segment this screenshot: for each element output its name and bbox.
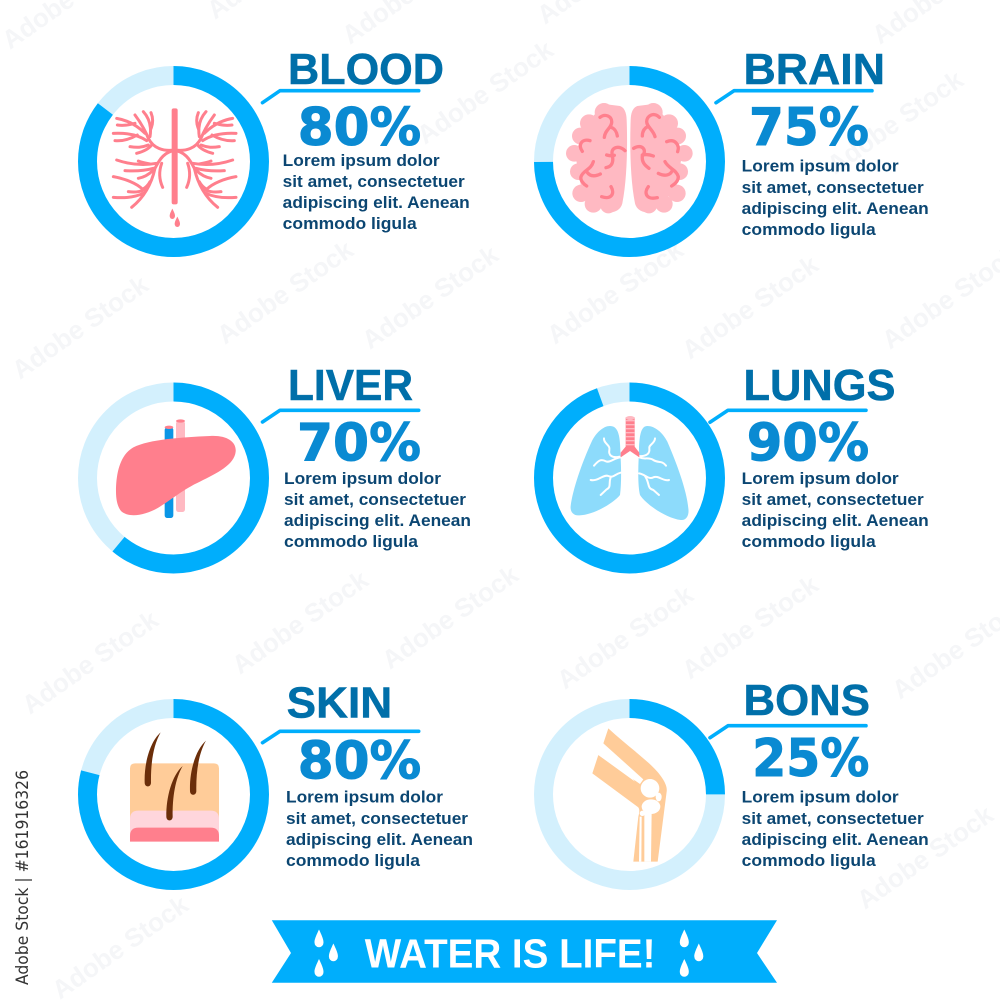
text block: sit amet, consectetuer xyxy=(284,491,467,509)
leader line xyxy=(710,410,866,422)
text block: adipiscing elit. Aenean xyxy=(284,512,471,530)
panel: lungs xyxy=(544,361,929,564)
text block xyxy=(284,470,471,551)
panel: skin xyxy=(88,679,473,880)
watermark: Adobe Stock xyxy=(551,579,699,695)
heading: brain: BRAIN xyxy=(744,45,885,94)
watermark: Adobe Stock xyxy=(851,799,999,915)
watermark: Adobe Stock xyxy=(16,604,164,720)
text block: Lorem ipsum dolor xyxy=(742,470,899,488)
percentage: 25%: 25% xyxy=(752,729,869,789)
text block: commodo ligula xyxy=(742,852,877,870)
panel: brain xyxy=(544,45,929,248)
leader line xyxy=(262,731,419,743)
watermark: Adobe Stock xyxy=(226,564,374,680)
heading: lungs: LUNGS xyxy=(744,361,896,410)
text block: sit amet, consectetuer xyxy=(742,179,924,197)
panel: bones xyxy=(544,676,929,880)
text block xyxy=(742,470,929,551)
leader line xyxy=(710,726,866,738)
donut chart: liver 70% xyxy=(88,392,260,564)
watermark: Adobe Stock xyxy=(376,559,524,675)
text block xyxy=(283,152,470,233)
text block: sit amet, consectetuer xyxy=(742,810,924,828)
text block: Lorem ipsum dolor xyxy=(286,789,444,807)
icon: left water drops xyxy=(314,930,338,977)
text block: commodo ligula xyxy=(283,215,418,233)
donut chart: lungs 90% xyxy=(544,392,716,564)
donut chart: blood 80% xyxy=(88,76,260,248)
percentage: 80%: 80% xyxy=(298,98,421,158)
icon: liver xyxy=(116,419,236,518)
heading: liver: LIVER xyxy=(288,361,413,410)
text block: sit amet, consectetuer xyxy=(283,173,465,191)
text block xyxy=(742,158,929,239)
text block: Lorem ipsum dolor xyxy=(283,152,440,170)
percentage: 70%: 70% xyxy=(297,414,421,474)
donut chart: brain 75% xyxy=(544,76,716,248)
heading: blood: BLOOD xyxy=(288,45,444,94)
watermark: Adobe Stock xyxy=(356,239,504,355)
text block: Lorem ipsum dolor xyxy=(284,470,442,488)
watermark: Adobe Stock xyxy=(411,34,559,150)
text block: Lorem ipsum dolor xyxy=(742,158,899,176)
text block xyxy=(742,789,929,870)
watermark: Adobe Stock xyxy=(676,249,824,365)
heading: bones: BONS xyxy=(744,676,870,725)
banner: water is life xyxy=(272,920,777,983)
watermark: Adobe Stock xyxy=(821,64,969,180)
text block: adipiscing elit. Aenean xyxy=(742,512,929,530)
watermark: Adobe Stock xyxy=(6,269,154,385)
text block: commodo ligula xyxy=(284,533,419,551)
percentage: 80%: 80% xyxy=(298,731,421,791)
text block: adipiscing elit. Aenean xyxy=(742,200,929,218)
ribbon shape xyxy=(272,920,777,983)
heading: skin: SKIN xyxy=(287,679,392,728)
donut chart: skin 80% xyxy=(88,708,260,880)
leader line xyxy=(716,91,872,103)
icon: right water drops xyxy=(680,930,703,977)
percentage: 90%: 90% xyxy=(747,414,869,474)
icon: knee joint xyxy=(592,728,667,862)
panel: liver xyxy=(88,361,471,564)
text block: sit amet, consectetuer xyxy=(286,810,469,828)
text block: adipiscing elit. Aenean xyxy=(742,831,929,849)
icon: brain xyxy=(566,103,693,213)
text block: adipiscing elit. Aenean xyxy=(283,194,470,212)
banner text: WATER IS LIFE! xyxy=(365,930,656,976)
icon: skin layers with hair xyxy=(130,732,219,842)
text block xyxy=(286,789,473,870)
text block: Lorem ipsum dolor xyxy=(742,789,899,807)
text block: commodo ligula xyxy=(742,533,877,551)
icon: lungs xyxy=(571,416,689,520)
text block: commodo ligula xyxy=(742,221,877,239)
icon: blood vessels xyxy=(113,108,236,227)
stock credit: Adobe Stock | #161916326 xyxy=(13,770,33,985)
watermark: Adobe Stock xyxy=(211,234,359,350)
watermark: Adobe Stock xyxy=(541,234,689,350)
text block: sit amet, consectetuer xyxy=(742,491,924,509)
text block: adipiscing elit. Aenean xyxy=(286,831,473,849)
panel: blood xyxy=(88,45,470,248)
percentage: 75%: 75% xyxy=(749,98,869,158)
donut chart: bones 25% xyxy=(544,708,716,880)
watermark: Adobe Stock xyxy=(676,569,824,685)
text block: commodo ligula xyxy=(286,852,421,870)
leader line xyxy=(262,410,419,422)
leader line xyxy=(262,91,419,103)
